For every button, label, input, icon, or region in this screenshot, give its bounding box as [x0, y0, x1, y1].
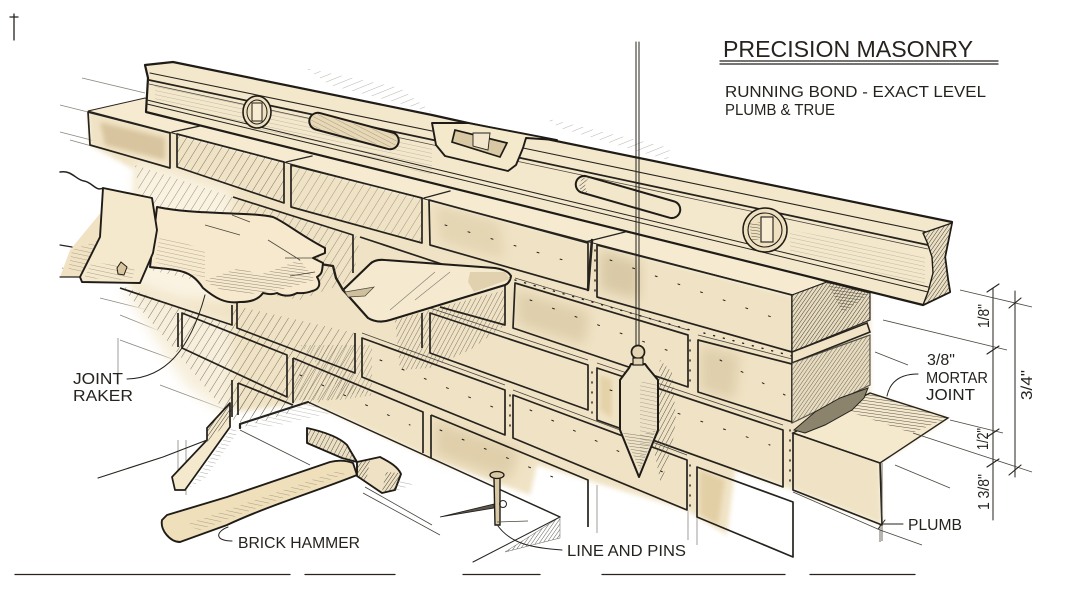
course 5 bricks	[232, 358, 793, 557]
right slot	[574, 174, 682, 220]
joint raker	[98, 402, 440, 535]
label: mortar joint: 3/8"	[927, 352, 955, 369]
claw	[307, 428, 357, 462]
handle	[162, 461, 357, 542]
plumb string	[636, 42, 639, 346]
label: line and pins	[498, 526, 686, 560]
dimension: 3/4: 3/4"	[1019, 370, 1036, 400]
subtitle: RUNNING BOND - EXACT LEVEL	[725, 84, 986, 101]
label: joint raker: JOINT	[73, 371, 123, 388]
trowel	[320, 260, 511, 322]
top surface of upper course	[88, 98, 827, 295]
course 3 bricks	[120, 288, 783, 487]
label: joint raker: RAKER	[73, 388, 133, 405]
title: PRECISION MASONRY	[723, 36, 973, 62]
raker line	[98, 440, 207, 478]
end block	[792, 282, 948, 525]
floor corner	[473, 517, 560, 562]
trowel tang	[320, 264, 343, 290]
dimension: 1 3/8: 1 3/8"	[976, 474, 993, 510]
label: plumb: PLUMB	[908, 517, 962, 534]
sleeve	[60, 172, 103, 189]
label: mortar joint: JOINT	[926, 387, 975, 404]
wall base lines	[308, 402, 560, 517]
head	[357, 457, 401, 493]
mortar stipple	[510, 250, 792, 508]
label: joint raker	[73, 295, 205, 405]
brick wall	[88, 98, 948, 557]
spirit level	[145, 62, 952, 305]
double mortar lines	[362, 278, 792, 455]
bob shadow	[653, 360, 676, 485]
hand	[150, 207, 325, 302]
left slot	[307, 111, 401, 151]
dimension: 1/2: 1/2"	[975, 428, 992, 450]
mortar joints on top	[172, 126, 625, 242]
mortar joint bead	[794, 388, 868, 433]
dimension lines	[875, 284, 1032, 520]
faint construction lines	[60, 68, 697, 545]
course 2 bricks	[233, 197, 792, 422]
plumb bob	[620, 42, 676, 485]
subtitle: PLUMB & TRUE	[725, 102, 835, 119]
line and pins	[440, 472, 560, 562]
label: line and pins: LINE AND PINS	[567, 543, 686, 560]
course 1 bricks	[88, 112, 792, 352]
tan blotches	[100, 122, 165, 160]
hand and cuff	[60, 172, 325, 302]
brick hammer	[162, 428, 415, 542]
dimension: 1/8: 1/8"	[976, 304, 993, 328]
crop mark	[10, 14, 18, 40]
bottom rule	[15, 574, 915, 576]
label: brick hammer: BRICK HAMMER	[238, 535, 360, 552]
course 4 bricks	[178, 313, 687, 510]
floor corner	[240, 402, 308, 428]
level rib lines	[150, 73, 927, 232]
cuff	[80, 188, 157, 283]
level body	[145, 62, 952, 305]
left vial	[243, 96, 271, 128]
bubble window	[452, 130, 507, 157]
label: brick hammer	[219, 527, 360, 552]
bob body	[620, 364, 658, 477]
level end profile	[923, 223, 952, 305]
label: mortar joint	[887, 352, 988, 404]
label: plumb	[878, 517, 962, 534]
wash behind brick wall	[88, 110, 948, 535]
subtitle	[725, 84, 986, 119]
label: mortar joint: MORTAR	[926, 370, 988, 387]
level centre notch	[432, 123, 557, 171]
right vial	[743, 208, 787, 252]
wall hatching	[120, 134, 505, 428]
